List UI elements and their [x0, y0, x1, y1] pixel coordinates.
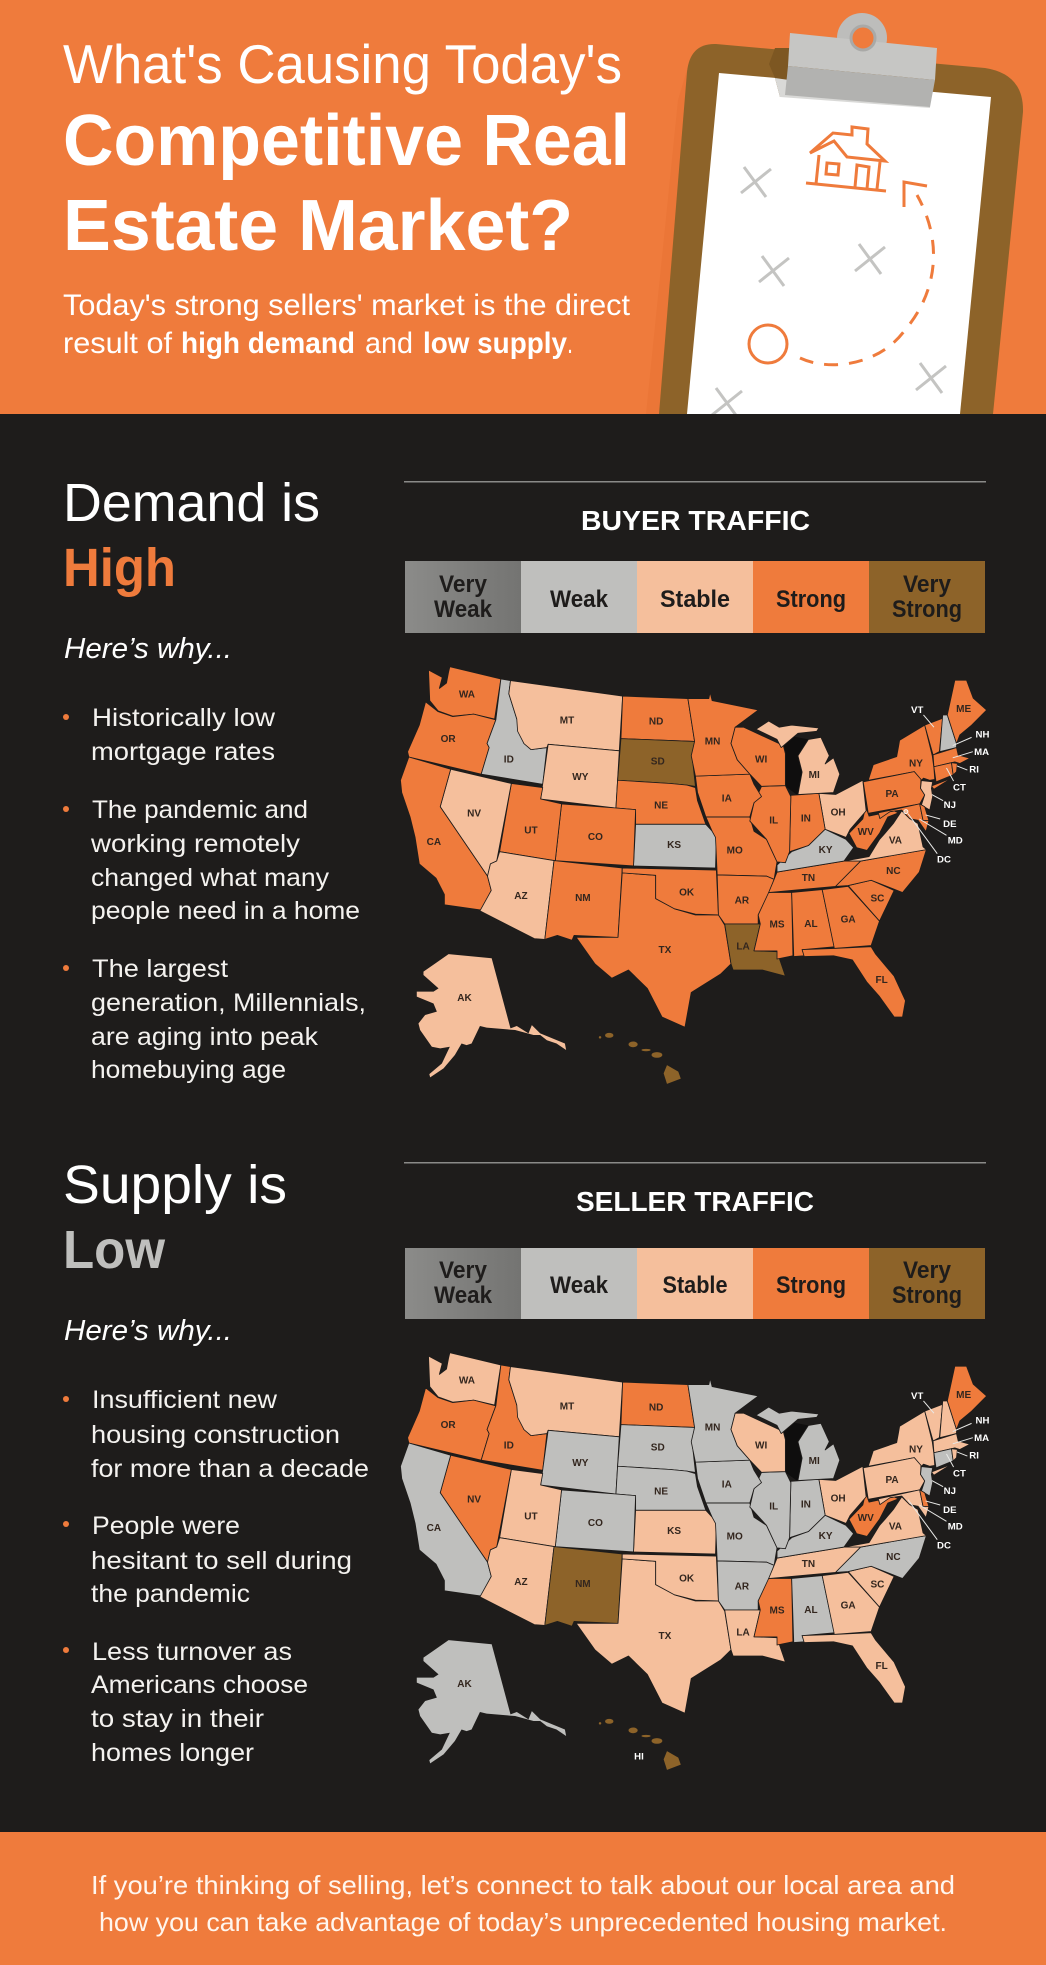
state: MO: MO [727, 845, 743, 856]
state: HI [599, 1033, 681, 1084]
state: KY: KY [819, 845, 833, 856]
state: WI: WI [755, 755, 767, 766]
arrow: dashed route from circle to house [749, 182, 934, 365]
heading: supply is low [63, 1155, 287, 1280]
state: ME: ME [956, 1390, 972, 1401]
state: RI [951, 763, 957, 775]
state: FL: FL [875, 1661, 888, 1672]
state: ND [621, 696, 695, 741]
heading: demand is high [63, 473, 320, 598]
state: MT [509, 681, 623, 751]
list: demand reasons: people need in a home [91, 897, 360, 925]
state: CA: CA [427, 1523, 441, 1534]
state: MO: MO [727, 1531, 743, 1542]
leader labels: small northeast states: MD [948, 836, 963, 846]
subtitle [63, 289, 631, 360]
map: seller traffic by state [400, 1353, 990, 1770]
state: NE [616, 780, 706, 824]
state: FL: FL [875, 975, 888, 986]
state: AK: AK [457, 1679, 473, 1690]
header panel [0, 0, 1046, 414]
state: KS: KS [667, 1526, 681, 1537]
state: WY [541, 744, 619, 808]
state: AL [792, 890, 834, 957]
state: IA: IA [722, 1480, 732, 1490]
leader labels: small northeast states: MA [974, 747, 989, 758]
state: KS [634, 824, 716, 868]
state: DE [920, 1490, 929, 1507]
state: NJ [921, 1467, 933, 1496]
heading: supply is low: Supply is [63, 1155, 287, 1215]
state: TN: TN [802, 873, 815, 884]
leader labels: small northeast states: CT [953, 1469, 966, 1479]
state: MT: MT [560, 1402, 574, 1412]
state: WI [731, 1413, 785, 1472]
state: LA: LA [736, 1628, 750, 1639]
state: MI: MI [809, 1456, 820, 1467]
state: MO [706, 817, 777, 879]
leader labels: small northeast states [904, 705, 990, 865]
state: IN [790, 1479, 825, 1538]
list: supply reasons: the pandemic [91, 1580, 250, 1608]
state: OR [408, 1388, 496, 1460]
state: NY [868, 725, 951, 789]
state: IL [750, 1472, 791, 1549]
state: SD: SD [651, 756, 665, 767]
state: OH: OH [831, 1494, 846, 1505]
state: NC: NC [886, 1552, 901, 1563]
state: AZ: AZ [514, 1577, 528, 1588]
state: OR [408, 702, 496, 774]
state: LA [725, 1610, 785, 1662]
state: AK [417, 1640, 566, 1763]
state: MA [933, 748, 970, 767]
state: UT [500, 1469, 562, 1547]
subtitle: Today's strong sellers' market is the direct [63, 289, 631, 322]
title: Estate Market? [63, 186, 573, 266]
state: RI [951, 1449, 957, 1461]
leader labels: small northeast states: DE [943, 819, 957, 830]
state: NC [836, 850, 926, 892]
state: SD [618, 739, 695, 786]
footer text: If you’re thinking of selling, let’s connect to talk about our local area and [91, 1870, 955, 1900]
state: HI: HI [634, 1751, 644, 1762]
state: GA: GA [841, 915, 856, 926]
list: demand reasons: The largest [92, 955, 228, 983]
state: IL: IL [769, 1502, 778, 1512]
state: NM: NM [575, 1579, 591, 1590]
state: CT [934, 763, 953, 782]
state: LA [725, 924, 785, 976]
list: demand reasons: generation, Millennials, [91, 989, 366, 1017]
state: MN [688, 692, 758, 776]
state: NV [440, 1455, 511, 1562]
legend: seller traffic: Weak [550, 1272, 609, 1299]
heading: seller traffic: SELLER TRAFFIC [576, 1186, 814, 1217]
state: SC: SC [870, 1580, 884, 1590]
state: OH [819, 780, 866, 837]
list: demand reasons: changed what many [91, 864, 330, 892]
list: supply reasons: to stay in their [91, 1705, 264, 1733]
state: AR: AR [735, 896, 749, 906]
footer text: how you can take advantage of today’s unprecedented housing market. [99, 1907, 947, 1937]
leader labels: small northeast states: DC [937, 854, 951, 865]
state: UT: UT [524, 1512, 538, 1523]
state: SD: SD [651, 1442, 665, 1453]
state: AR: AR [735, 1582, 749, 1592]
leader labels: small northeast states: MD [948, 1522, 963, 1532]
state: ND [621, 1382, 695, 1427]
list: demand reasons: mortgage rates [91, 738, 275, 766]
state: MS: MS [769, 1606, 785, 1617]
state: NM: NM [575, 893, 591, 904]
state: PA: PA [885, 1475, 899, 1486]
state: AZ: AZ [514, 891, 528, 902]
state: CT [934, 1449, 953, 1468]
list: demand reasons [63, 704, 366, 1084]
state: NM [545, 1547, 622, 1626]
state: ME [947, 1366, 987, 1429]
legend: seller traffic: Strong [892, 1282, 962, 1309]
list: supply reasons: hesitant to sell during [91, 1547, 352, 1575]
leader labels: small northeast states: NH [976, 729, 990, 740]
state: OK [622, 1554, 718, 1601]
footer text [91, 1870, 955, 1937]
state: OH: OH [831, 808, 846, 819]
state: WA [428, 1353, 501, 1405]
legend: seller traffic [405, 1248, 985, 1319]
state: MS [754, 1578, 793, 1645]
state: VT [925, 1404, 943, 1441]
state: AR [717, 875, 774, 924]
legend: buyer traffic: Strong [776, 586, 846, 613]
state: IL: IL [769, 816, 778, 826]
state: KY [777, 1515, 854, 1558]
state: CA [400, 757, 491, 910]
icon: clipboard [646, 13, 1023, 414]
state: UT: UT [524, 826, 538, 837]
state: ID: ID [504, 1440, 514, 1451]
state: MS: MS [769, 920, 785, 931]
legend: seller traffic: Weak [434, 1282, 493, 1309]
legend: buyer traffic [405, 561, 985, 633]
leader labels: small northeast states: MA [974, 1433, 989, 1444]
state: TN: TN [802, 1559, 815, 1570]
leader labels: small northeast states: DE [943, 1505, 957, 1516]
state: KS: KS [667, 840, 681, 851]
state: ID [481, 1365, 547, 1470]
subtitle: result of [63, 327, 173, 360]
state: MN [688, 1378, 758, 1462]
leader labels: small northeast states: CT [953, 783, 966, 793]
text: here's why demand: Here’s why... [64, 633, 232, 665]
leader labels: small northeast states [908, 1391, 990, 1551]
subtitle: and [365, 327, 413, 360]
heading: demand is high: High [63, 538, 176, 598]
state: MI [756, 721, 840, 795]
state: CA: CA [427, 837, 441, 848]
list: supply reasons: homes longer [91, 1739, 254, 1767]
state: AL: AL [804, 919, 818, 930]
state: PA [863, 1458, 925, 1499]
legend: buyer traffic: Very [903, 571, 952, 598]
state: IA [695, 774, 762, 817]
legend: seller traffic: Very [903, 1257, 952, 1284]
state: VA [844, 1497, 926, 1547]
state: UT [500, 783, 562, 861]
state: IN [790, 793, 825, 852]
state: NV [440, 769, 511, 876]
state: MN: MN [705, 737, 720, 748]
state: OK [622, 868, 718, 915]
state: FL [802, 1633, 905, 1703]
state: MT: MT [560, 716, 574, 726]
state: CO [555, 1490, 636, 1552]
list: supply reasons: Americans choose [91, 1671, 308, 1699]
state: IA: IA [722, 794, 732, 804]
state: VT [925, 718, 943, 755]
state: MD [878, 1490, 929, 1518]
list: demand reasons: Historically low [92, 704, 276, 732]
state: OK: OK [679, 887, 695, 898]
state: FL [802, 947, 905, 1017]
state: NH [940, 715, 957, 752]
state: OR: OR [441, 734, 456, 745]
legend: buyer traffic: Stable [660, 586, 730, 613]
legend: seller traffic: Very [439, 1257, 488, 1284]
footer panel [0, 1832, 1046, 1965]
state: TN [769, 861, 861, 892]
list: supply reasons: People were [92, 1512, 240, 1540]
legend: buyer traffic: Strong [892, 596, 962, 623]
icon: house on clipboard [806, 127, 886, 191]
state: OR: OR [441, 1420, 456, 1431]
state: WV: WV [858, 827, 874, 838]
list: supply reasons: housing construction [91, 1421, 340, 1449]
state: WY [541, 1430, 619, 1494]
state: ID: ID [504, 754, 514, 765]
state: IN: IN [801, 1500, 811, 1510]
leader labels: small northeast states: VT [911, 1391, 924, 1402]
state: ND: ND [649, 716, 663, 727]
list: demand reasons: working remotely [90, 830, 301, 858]
state: DE [920, 804, 929, 821]
state: TX [576, 873, 731, 1027]
state: AK [417, 954, 566, 1077]
state: SC [848, 880, 894, 921]
state: WI [731, 727, 785, 786]
state: WA: WA [459, 689, 475, 700]
state: NJ [921, 781, 933, 810]
text: here's why supply: Here’s why... [64, 1315, 232, 1347]
subtitle: . [567, 327, 573, 360]
state: CO: CO [588, 1518, 603, 1529]
state: NE [616, 1466, 706, 1510]
state: WV [849, 807, 898, 850]
list: supply reasons: Less turnover as [92, 1638, 292, 1666]
state: KY [777, 829, 854, 872]
heading: supply is low: Low [63, 1220, 166, 1280]
state: CO [555, 804, 636, 866]
state: KS [634, 1510, 716, 1554]
leader labels: small northeast states: NJ [944, 800, 956, 811]
leader labels: small northeast states: RI [969, 1451, 979, 1461]
state: NC [836, 1536, 926, 1578]
state: TN [769, 1547, 861, 1578]
state: VA [844, 811, 926, 861]
state: NV: NV [467, 809, 481, 820]
title [63, 33, 630, 266]
state: IL [750, 786, 791, 863]
state: MO [706, 1503, 777, 1565]
leader labels: small northeast states: NJ [944, 1486, 956, 1497]
legend: buyer traffic: Weak [434, 596, 493, 623]
state: NC: NC [886, 866, 901, 877]
state: ME: ME [956, 704, 972, 715]
state: MA [933, 1434, 970, 1453]
state: GA: GA [841, 1601, 856, 1612]
heading: buyer traffic: BUYER TRAFFIC [581, 505, 810, 536]
state: NY [868, 1411, 951, 1475]
state: TX: TX [658, 945, 672, 956]
state: OK: OK [679, 1573, 695, 1584]
state: SC: SC [870, 894, 884, 904]
state: MI [756, 1407, 840, 1481]
leader labels: small northeast states: VT [911, 705, 924, 716]
state: SC [848, 1566, 894, 1607]
title: Competitive Real [63, 101, 630, 181]
list: demand reasons: The pandemic and [92, 796, 308, 824]
leader labels: small northeast states: DC [937, 1540, 951, 1551]
state: HI [599, 1719, 681, 1770]
state: WA [428, 667, 501, 719]
state: WY: WY [572, 1458, 589, 1469]
state: WV [849, 1493, 898, 1536]
state: GA [822, 886, 880, 948]
subtitle: low supply [423, 327, 567, 360]
legend: seller traffic: Stable [662, 1272, 728, 1299]
subtitle: high demand [181, 327, 355, 360]
state: WV: WV [858, 1513, 874, 1524]
state: MD [878, 804, 929, 832]
list: supply reasons: for more than a decade [91, 1455, 369, 1483]
state: PA [863, 772, 925, 813]
state: ID [481, 679, 547, 784]
state: MS [754, 892, 793, 959]
state: NM [545, 861, 622, 940]
state: AR [717, 1561, 774, 1610]
state: NE: NE [654, 1486, 668, 1497]
state: IN: IN [801, 814, 811, 824]
state: CO: CO [588, 832, 603, 843]
list: supply reasons [63, 1386, 369, 1767]
state: SD [618, 1425, 695, 1472]
state: PA: PA [885, 789, 899, 800]
state: VA: VA [889, 836, 902, 846]
legend: buyer traffic: Weak [550, 586, 609, 613]
state: NY: NY [909, 1444, 923, 1455]
state: WA: WA [459, 1375, 475, 1386]
list: demand reasons: homebuying age [91, 1056, 286, 1084]
list: demand reasons: are aging into peak [91, 1023, 319, 1051]
state: MI: MI [809, 770, 820, 781]
state: AL [792, 1576, 834, 1643]
state: NV: NV [467, 1495, 481, 1506]
state: AL: AL [804, 1605, 818, 1616]
state: NY: NY [909, 758, 923, 769]
state: GA [822, 1572, 880, 1634]
state: IA [695, 1460, 762, 1503]
list: supply reasons: Insufficient new [92, 1386, 278, 1414]
icon: x marks [712, 167, 946, 418]
state: WI: WI [755, 1441, 767, 1452]
leader labels: small northeast states: NH [976, 1415, 990, 1426]
state: ME [947, 680, 987, 743]
state: TX: TX [658, 1631, 672, 1642]
legend: seller traffic: Strong [776, 1272, 846, 1299]
state: MN: MN [705, 1423, 720, 1434]
state: CA [400, 1443, 491, 1596]
state: MT [509, 1367, 623, 1437]
leader labels: small northeast states: RI [969, 765, 979, 775]
state: AZ [480, 852, 554, 939]
state: AK: AK [457, 993, 473, 1004]
state: VA: VA [889, 1522, 902, 1532]
state: TX [576, 1559, 731, 1713]
state: KY: KY [819, 1531, 833, 1542]
state: NE: NE [654, 800, 668, 811]
legend: buyer traffic: Very [439, 571, 488, 598]
state: LA: LA [736, 942, 750, 953]
heading: demand is high: Demand is [63, 473, 320, 533]
state: OH [819, 1466, 866, 1523]
state: ND: ND [649, 1402, 663, 1413]
state: NH [940, 1401, 957, 1438]
state: WY: WY [572, 772, 589, 783]
title: What's Causing Today's [63, 33, 622, 95]
map: buyer traffic by state [400, 667, 990, 1084]
state: AZ [480, 1538, 554, 1625]
